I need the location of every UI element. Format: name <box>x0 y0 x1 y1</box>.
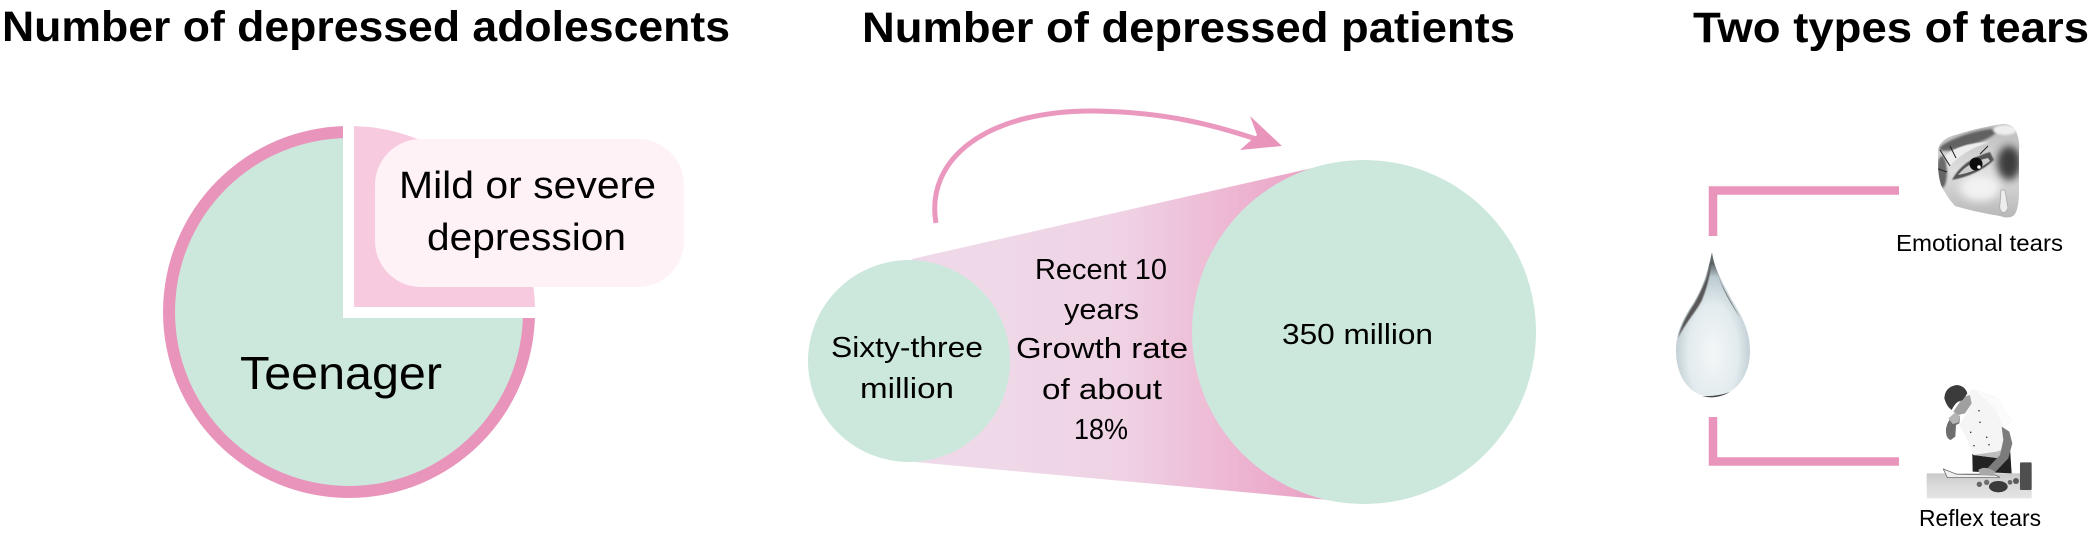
circle: end value <box>1192 160 1536 504</box>
pie slice: depression share <box>354 126 535 307</box>
panel: two types of tears <box>1676 120 2063 531</box>
pie outer ring <box>163 126 535 498</box>
cone text: growth rate: Recent 10 <box>1035 254 1167 286</box>
heading: Number of depressed patients: Number of depressed patients <box>862 4 1515 52</box>
head <box>1953 395 1972 415</box>
label: Emotional tears: Emotional tears <box>1896 230 2063 256</box>
table <box>1927 473 2032 498</box>
cone text: growth rate: years <box>1064 294 1139 326</box>
callout: mild or severe depression <box>375 139 684 287</box>
panel: adolescents pie chart <box>163 120 684 498</box>
circle: start value: Sixty-three <box>831 332 983 364</box>
left arm and hands <box>1946 416 1960 440</box>
icon: water drop <box>1676 252 1750 397</box>
label: Reflex tears: Reflex tears <box>1919 505 2041 531</box>
circle: start value: million <box>860 373 954 405</box>
shirt buttons <box>1970 410 1990 446</box>
pie main slice: teenager <box>175 138 523 486</box>
bracket to emotional tears <box>1713 190 1899 236</box>
right arm <box>1983 427 2012 473</box>
growth arrow <box>935 111 1282 223</box>
cone text: growth rate <box>1016 254 1188 446</box>
callout: mild or severe depression: Mild or severe <box>399 165 656 207</box>
shirt <box>1959 389 2012 458</box>
pie white separator <box>343 120 540 318</box>
heading: Number of depressed adolescents: Number of depressed adolescents <box>2 3 730 51</box>
panel: patient growth cone <box>808 111 1536 504</box>
cutting board and knife <box>1943 469 2000 478</box>
label: Teenager: Teenager <box>240 347 442 399</box>
trousers <box>1972 448 2012 473</box>
cone text: growth rate: 18% <box>1074 414 1128 446</box>
bracket to reflex tears <box>1713 417 1899 462</box>
photo: chef crying while cutting <box>1927 385 2032 498</box>
cone connecting circles <box>912 167 1340 501</box>
cone text: growth rate: of about <box>1042 374 1162 406</box>
circle: end value: 350 million <box>1282 319 1433 351</box>
jar <box>2020 462 2032 490</box>
tomatoes <box>1977 478 2019 492</box>
circle: start value <box>808 260 1010 462</box>
cone text: growth rate: Growth rate <box>1016 333 1188 365</box>
callout: mild or severe depression: depression <box>427 217 626 259</box>
heading: Two types of tears: Two types of tears <box>1693 4 2089 52</box>
photo: crying eye <box>1938 124 2020 218</box>
